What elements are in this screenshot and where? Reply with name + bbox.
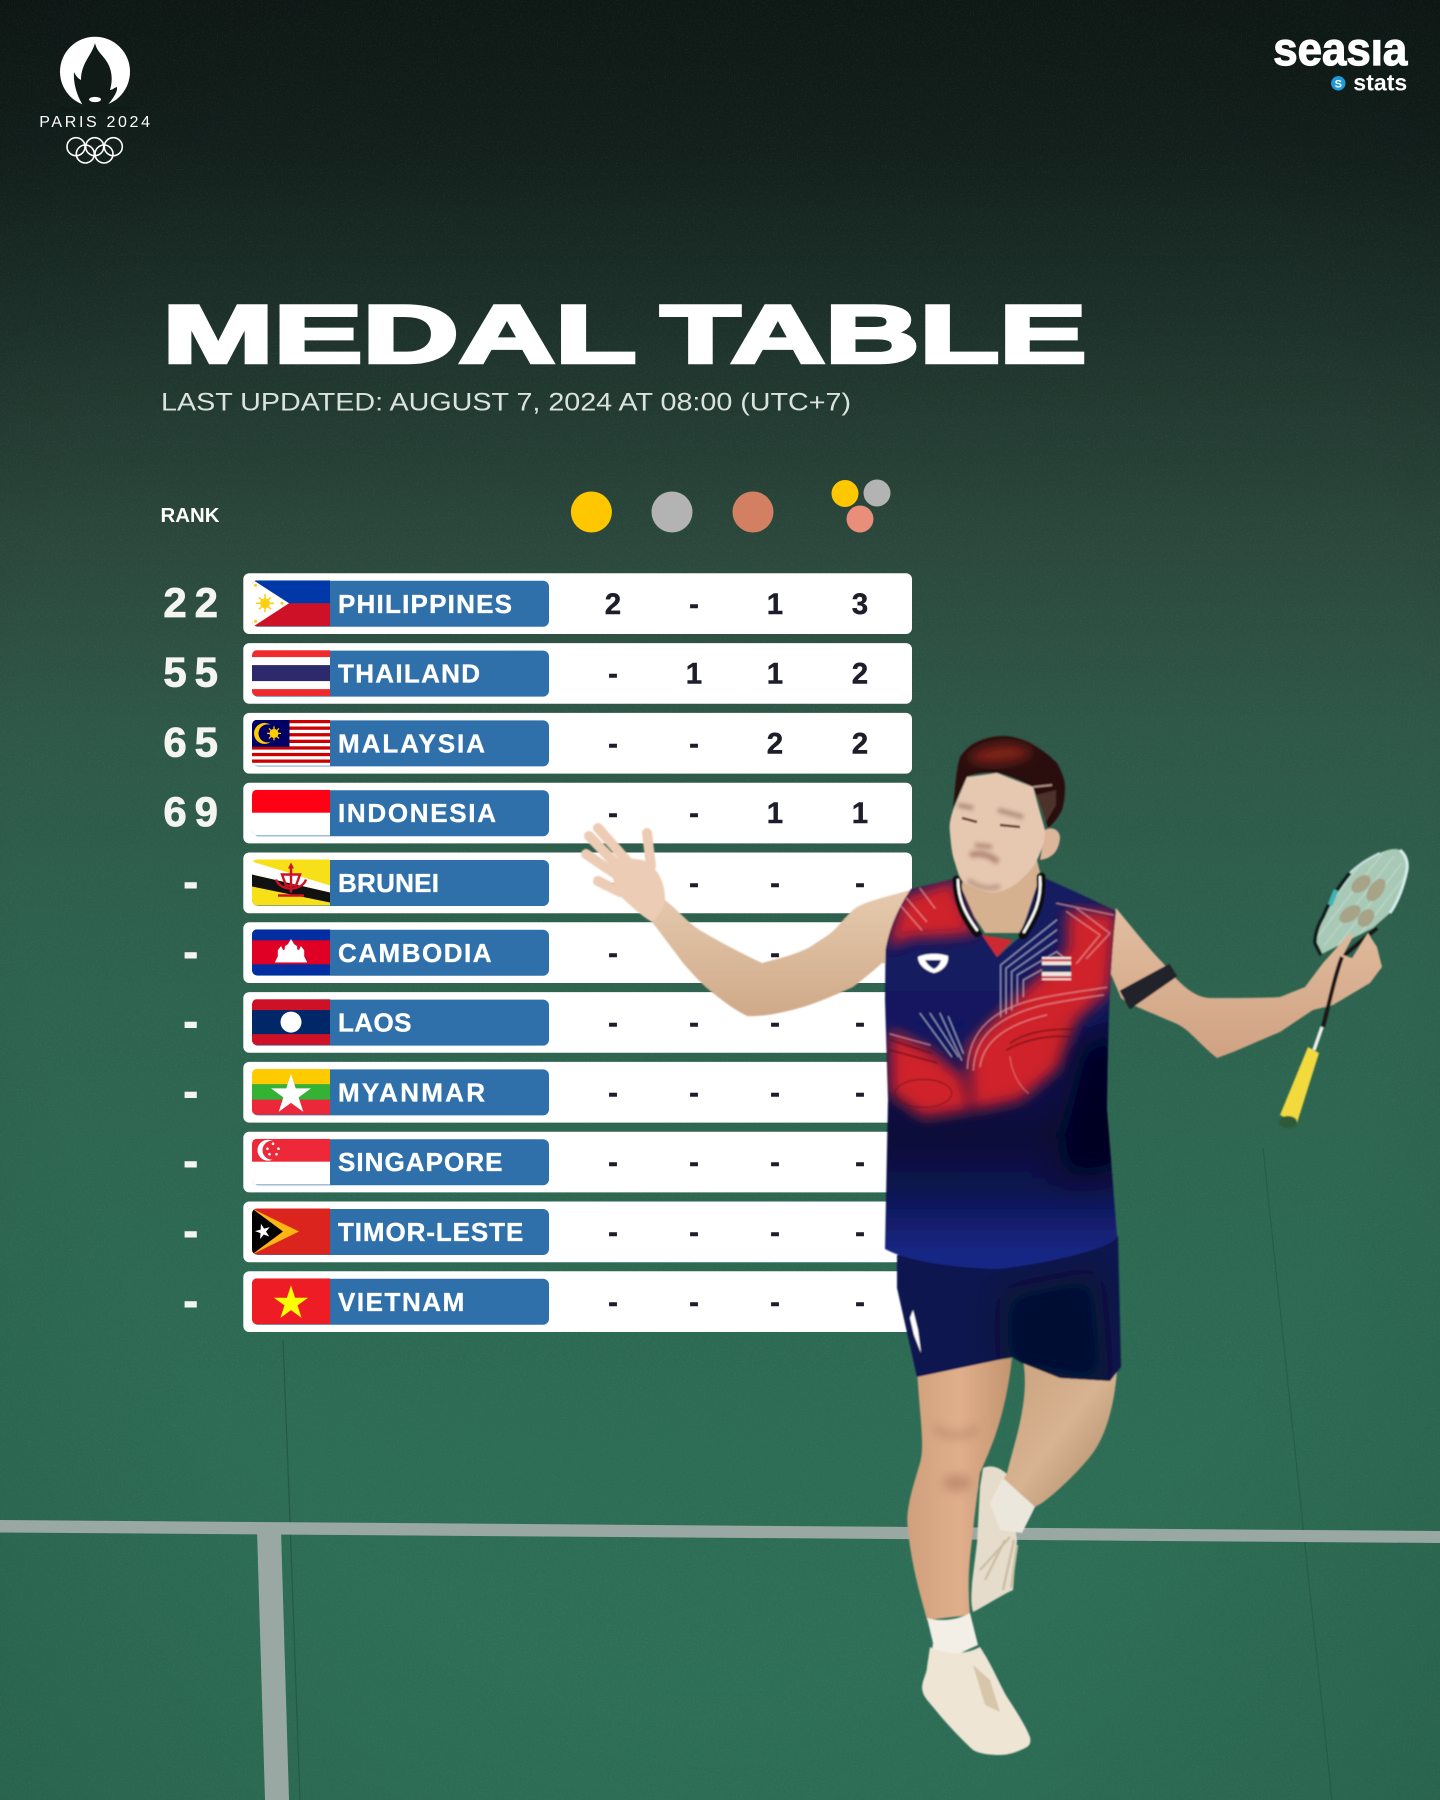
- raised shoe: [971, 1466, 1017, 1612]
- row: Malaysia: [163, 713, 912, 774]
- row: Myanmar: -: [689, 1076, 699, 1109]
- title: [162, 290, 1086, 380]
- jersey flag: Thailand: [1042, 957, 1071, 980]
- right arm and hand: [1105, 908, 1382, 1058]
- row: Philippines: [163, 573, 912, 634]
- row: Myanmar: MYANMAR: [338, 1077, 485, 1107]
- flag: Thailand: [252, 650, 330, 696]
- row: Indonesia: 69: [163, 788, 226, 835]
- row: Laos: -: [608, 1007, 618, 1040]
- flag: Timor-Leste: [252, 1208, 330, 1254]
- jersey stripes: [889, 888, 1113, 1107]
- flag: Cambodia: [252, 929, 330, 975]
- column header: rank: RANK: [160, 504, 220, 527]
- row: Vietnam: [183, 1271, 912, 1332]
- court lines: [0, 1520, 1440, 1800]
- bent leg: [1003, 1360, 1117, 1507]
- icon: olympic rings: [67, 138, 122, 163]
- flag: Philippines: [252, 579, 330, 627]
- hair: [953, 736, 1065, 828]
- flag: Brunei: [252, 860, 330, 906]
- row: Philippines: 2: [605, 588, 621, 621]
- flag: Malaysia: [252, 720, 330, 766]
- row: Cambodia: -: [608, 937, 618, 970]
- jersey shadow: [1060, 1020, 1125, 1180]
- row: Cambodia: -: [770, 937, 780, 970]
- logo: seasia stats: [1274, 39, 1408, 90]
- row: Philippines: 22: [163, 579, 226, 626]
- neck: [960, 860, 1042, 933]
- row: Timor-Leste: TIMOR-LESTE: [338, 1217, 523, 1247]
- flag: Singapore: [252, 1139, 330, 1185]
- row: Myanmar: -: [608, 1076, 618, 1109]
- row: Singapore: -: [689, 1146, 699, 1179]
- row: Vietnam: -: [689, 1286, 699, 1319]
- row: Philippines: PHILIPPINES: [338, 589, 512, 619]
- row: Thailand: THAILAND: [338, 659, 480, 689]
- icon: bronze medal: [732, 492, 774, 532]
- row: Singapore: -: [183, 1137, 198, 1186]
- row: Vietnam: -: [183, 1276, 198, 1325]
- emblem: flame in circle: [60, 37, 130, 112]
- jersey logo: [918, 954, 948, 973]
- shorts: [897, 1236, 1121, 1390]
- column headers: medal icons: [571, 480, 890, 532]
- row: Indonesia: [163, 783, 912, 843]
- logo: Paris 2024: [39, 37, 150, 163]
- row: Cambodia: -: [855, 937, 865, 970]
- row: Myanmar: [183, 1062, 912, 1123]
- icon: gold medal: [571, 492, 612, 532]
- flag: Laos: [252, 999, 330, 1045]
- row: Laos: -: [183, 997, 198, 1046]
- wordmark: stats: stats: [1353, 70, 1407, 96]
- row: Philippines: 1: [767, 588, 783, 621]
- row: Laos: LAOS: [338, 1008, 412, 1038]
- icon: blue S: S: [1335, 78, 1342, 90]
- row: Cambodia: CAMBODIA: [338, 938, 492, 968]
- row: Singapore: [183, 1132, 912, 1192]
- shoe laces: [980, 1537, 1017, 1590]
- armband: [1121, 965, 1176, 1008]
- row: Timor-Leste: -: [608, 1216, 618, 1249]
- lower shoe: [922, 1647, 1030, 1755]
- row: Myanmar: -: [855, 1076, 865, 1109]
- row: Malaysia: -: [608, 727, 618, 760]
- row: Malaysia: 2: [852, 727, 868, 760]
- row: Malaysia: MALAYSIA: [338, 728, 485, 758]
- jersey inset: [982, 935, 1013, 957]
- jersey: [885, 876, 1125, 1269]
- badminton player: [586, 736, 1418, 1755]
- handle: [1280, 1047, 1319, 1123]
- row: Brunei: BRUNEI: [338, 868, 439, 898]
- row: Timor-Leste: [183, 1202, 912, 1262]
- row: Timor-Leste: -: [689, 1216, 699, 1249]
- head: [950, 736, 1065, 893]
- row: Singapore: -: [855, 1146, 865, 1179]
- row: Thailand: -: [608, 658, 618, 691]
- row: Singapore: SINGAPORE: [338, 1147, 502, 1177]
- row: Laos: -: [770, 1007, 780, 1040]
- title: MEDAL: [162, 290, 636, 380]
- row: Indonesia: 1: [767, 797, 783, 830]
- row: Cambodia: [183, 922, 912, 983]
- row: Vietnam: -: [855, 1286, 865, 1319]
- row: Vietnam: -: [770, 1286, 780, 1319]
- racket shaft over hand: [1323, 957, 1342, 1027]
- row: Cambodia: -: [183, 927, 198, 976]
- row: Singapore: -: [770, 1146, 780, 1179]
- medal table: [163, 573, 912, 1332]
- row: Philippines: -: [689, 588, 699, 621]
- row: Vietnam: -: [608, 1286, 618, 1319]
- row: Indonesia: 1: [852, 797, 868, 830]
- upper sock: [990, 1478, 1035, 1533]
- face features: [958, 805, 1023, 888]
- row: Indonesia: -: [689, 797, 699, 830]
- subtitle: last updated: LAST UPDATED: AUGUST 7, 2024 AT 08:00 (UTC+7): [161, 388, 851, 416]
- row: Brunei: -: [770, 867, 780, 900]
- row: Malaysia: 2: [767, 727, 783, 760]
- row: Laos: -: [689, 1007, 699, 1040]
- row: Brunei: -: [689, 867, 699, 900]
- row: Brunei: -: [608, 867, 618, 900]
- row: Thailand: 1: [686, 658, 702, 691]
- row: Brunei: -: [855, 867, 865, 900]
- face: [950, 773, 1045, 893]
- flag: Indonesia: [252, 790, 330, 836]
- jersey red pattern: [887, 880, 1117, 1117]
- knee shading: [934, 1427, 978, 1491]
- title: TABLE: [660, 290, 1086, 380]
- icon: total medals: [832, 480, 890, 532]
- row: Timor-Leste: -: [855, 1216, 865, 1249]
- row: Myanmar: -: [183, 1067, 198, 1116]
- lower sock: [927, 1613, 978, 1667]
- row: Indonesia: -: [608, 797, 618, 830]
- icon: silver medal: [652, 492, 692, 532]
- row: Malaysia: -: [689, 727, 699, 760]
- row: Thailand: 55: [163, 649, 226, 696]
- wordmark: seasia: seasia: [1273, 23, 1408, 75]
- row: Thailand: 2: [852, 658, 868, 691]
- ear: [1040, 828, 1060, 860]
- row: Indonesia: INDONESIA: [338, 798, 496, 828]
- row: Timor-Leste: -: [770, 1216, 780, 1249]
- row: Laos: [183, 992, 912, 1053]
- row: Vietnam: VIETNAM: [338, 1287, 464, 1317]
- row: Malaysia: 65: [163, 718, 226, 765]
- row: Brunei: -: [183, 858, 198, 906]
- row: Timor-Leste: -: [183, 1206, 198, 1256]
- row: Thailand: 1: [767, 658, 783, 691]
- standing leg: [907, 1358, 1012, 1620]
- row: Myanmar: -: [770, 1076, 780, 1109]
- row: Brunei: [183, 852, 912, 913]
- flag: Myanmar: [252, 1069, 330, 1115]
- row: Singapore: -: [608, 1146, 618, 1179]
- row: Laos: -: [855, 1007, 865, 1040]
- flag: Vietnam: [252, 1278, 330, 1324]
- collar: [957, 877, 1041, 935]
- racket: [1279, 835, 1418, 1128]
- row: Cambodia: -: [689, 937, 699, 970]
- row: Philippines: 3: [852, 588, 868, 621]
- left arm and hand: [586, 828, 910, 1016]
- label: Paris 2024: PARIS 2024: [39, 114, 150, 131]
- row: Thailand: [163, 643, 912, 704]
